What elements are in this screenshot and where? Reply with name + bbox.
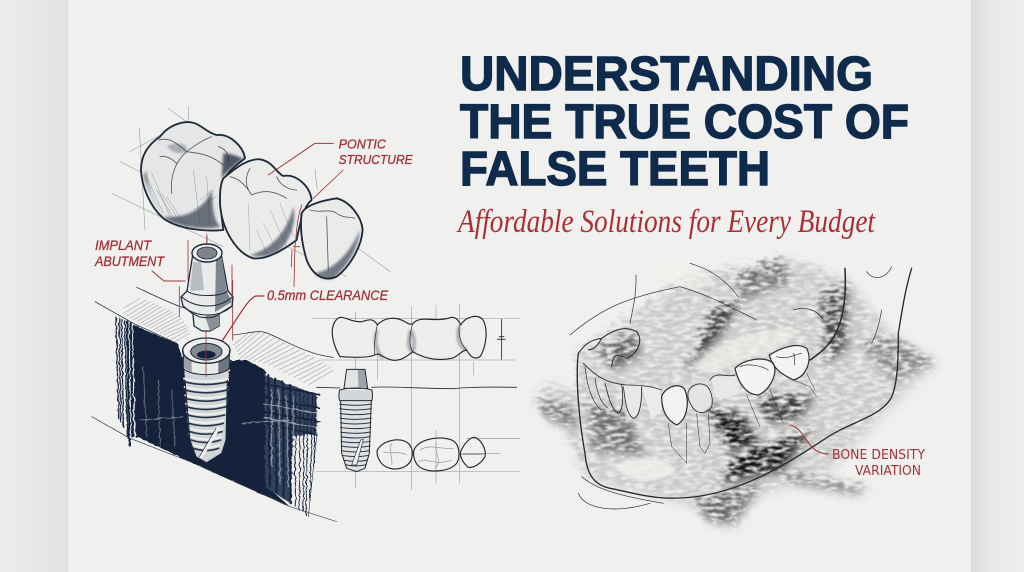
label: bone density variation bbox=[832, 448, 925, 479]
small implant elevation bbox=[339, 369, 372, 472]
illustration: charcoal jaw sketch bbox=[533, 257, 938, 527]
occlusal view teeth bbox=[377, 437, 485, 471]
light pencil streaks in bone bbox=[140, 367, 320, 493]
red callout curve bbox=[790, 425, 828, 454]
label: bone density variation: BONE DENSITY bbox=[832, 448, 925, 463]
tooth: centre pontic bbox=[220, 159, 312, 258]
bone surface hatching bbox=[123, 298, 333, 385]
title: UNDERSTANDING bbox=[460, 48, 873, 101]
white highlights bbox=[613, 263, 797, 481]
label: clearance bbox=[216, 288, 389, 350]
label: clearance: 0.5mm CLEARANCE bbox=[267, 288, 389, 303]
callout text: pontic structure bbox=[339, 136, 414, 167]
bridge side view bbox=[332, 316, 486, 360]
dimension marker bbox=[497, 319, 505, 359]
callout text: pontic structure: PONTIC bbox=[339, 136, 386, 151]
implant fixture bbox=[183, 338, 230, 463]
illustration: bridge and implant technical drawing bbox=[312, 303, 520, 490]
lower teeth bbox=[578, 329, 817, 463]
clearance marker lines bbox=[291, 170, 343, 287]
callout line: pontic bbox=[268, 143, 333, 175]
charcoal smudges bbox=[533, 257, 938, 527]
tooth: right premolar bbox=[301, 198, 363, 279]
gum line bbox=[317, 387, 517, 389]
title: THE TRUE COST OF bbox=[460, 96, 909, 149]
dark cut bone block bbox=[116, 317, 320, 515]
title bbox=[460, 48, 909, 196]
title: FALSE TEETH bbox=[460, 143, 770, 196]
illustration: implant abutment bbox=[181, 235, 233, 331]
label: bone density variation: VARIATION bbox=[855, 464, 921, 479]
jaw outlines bbox=[570, 263, 912, 509]
label: implant abutment bbox=[94, 238, 185, 281]
label: implant abutment: ABUTMENT bbox=[94, 254, 166, 269]
subtitle: Affordable Solutions for Every Budget bbox=[456, 204, 876, 240]
tooth: left molar bbox=[141, 122, 245, 231]
label: implant abutment: IMPLANT bbox=[95, 238, 153, 253]
illustration: bone cross-section with implant bbox=[92, 280, 337, 522]
callout text: pontic structure: STRUCTURE bbox=[339, 152, 414, 167]
illustration: crown bridge teeth sketch bbox=[112, 107, 414, 287]
